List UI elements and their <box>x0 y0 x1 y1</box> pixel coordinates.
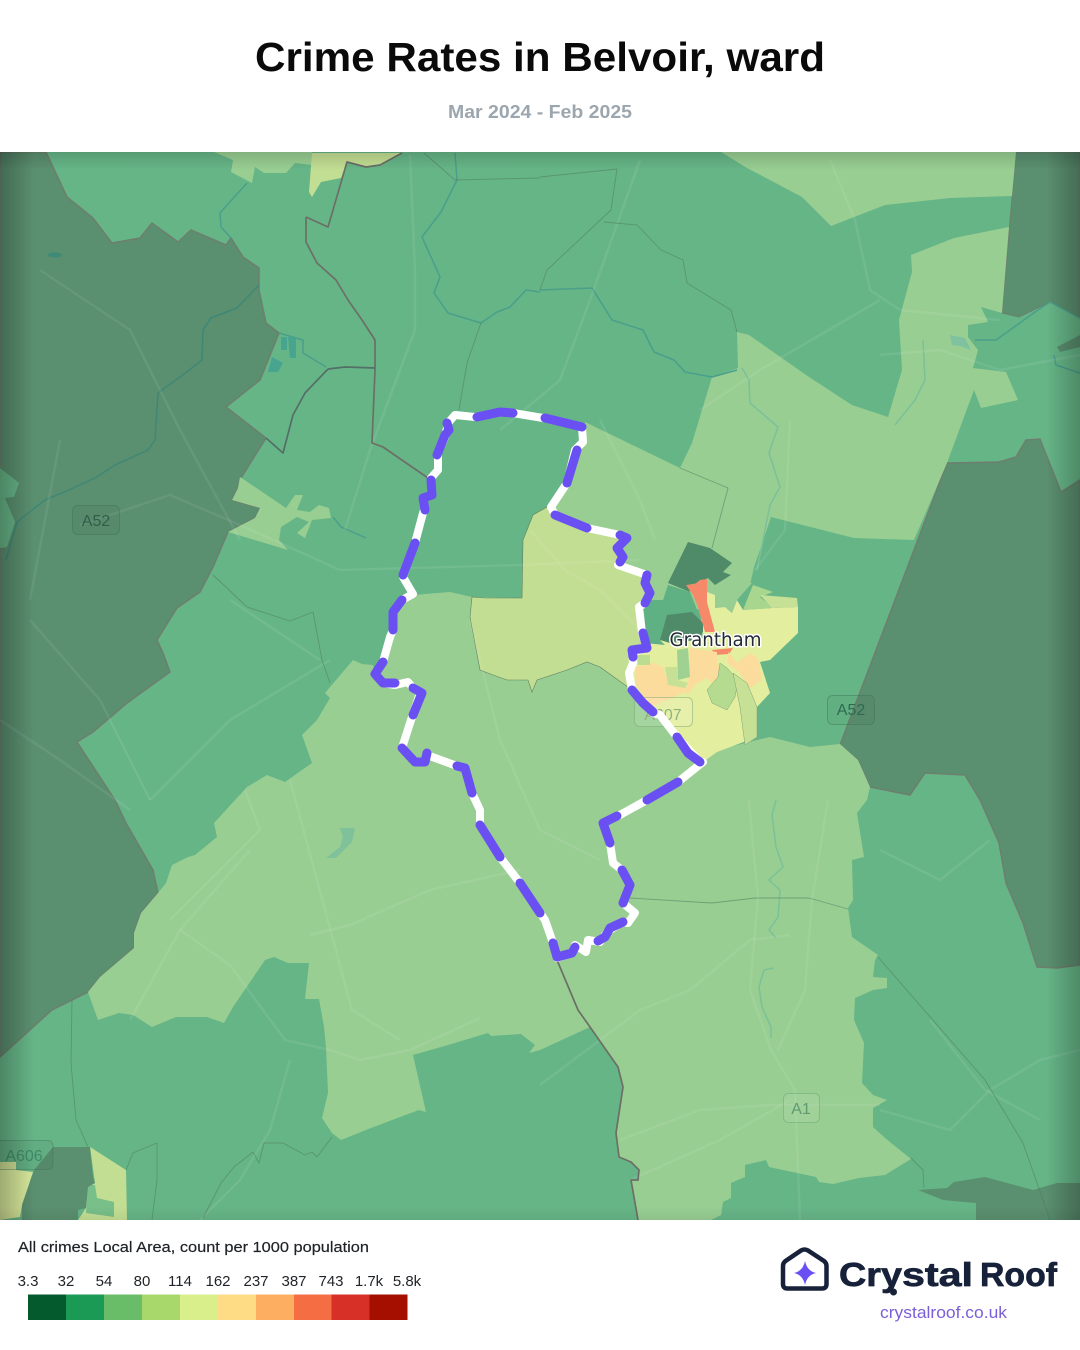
road label: A52 west: A52 <box>82 513 110 530</box>
region: dark east <box>840 439 1080 968</box>
ward boundary: Belvoir <box>375 412 703 958</box>
road label: A1 <box>784 1094 820 1122</box>
legend title: All crimes Local Area, count per 1000 population <box>18 1239 369 1256</box>
ward: pale green north-east <box>743 585 773 610</box>
ward: high crime orange centre <box>712 648 733 655</box>
gray district boundaries <box>266 153 639 1220</box>
ward: mid green west <box>645 585 702 645</box>
icon: house <box>783 1250 826 1288</box>
legend tick labels: 54 <box>96 1273 112 1290</box>
map edge shading <box>0 152 1080 1220</box>
legend tick labels: 3.3 <box>18 1273 38 1290</box>
website link: crystalroof.co.uk <box>880 1304 1008 1322</box>
ward: pale green north <box>716 582 752 613</box>
icon: star <box>794 1261 816 1285</box>
Grantham urban wards <box>632 542 798 762</box>
road label: A52 east: A52 <box>837 702 865 719</box>
title: Crime Rates in Belvoir, ward <box>255 34 825 80</box>
legend <box>18 1239 422 1320</box>
logo: Crystal Roof <box>783 1250 1058 1322</box>
subtitle: date range: Mar 2024 - Feb 2025 <box>448 101 632 122</box>
region: bottom-left dark <box>22 1147 95 1220</box>
thin boundary lines <box>71 153 1050 1220</box>
road label: A607: A607 <box>644 707 682 724</box>
wordmark: stal <box>902 1256 973 1293</box>
ward: peach right <box>728 652 762 688</box>
road label: A1: A1 <box>791 1101 811 1118</box>
legend colour scale <box>28 1294 408 1320</box>
wordmark: Cr <box>839 1256 881 1293</box>
legend tick labels: 80 <box>134 1273 150 1290</box>
road label: A607 <box>634 698 692 726</box>
ward: yellow green west <box>665 667 688 688</box>
ward: main pale yellow <box>632 592 798 762</box>
legend tick labels: 237 <box>243 1273 269 1290</box>
wordmark: Roof <box>980 1256 1058 1293</box>
ward: small square <box>637 655 650 665</box>
map base: mid green areas <box>0 152 1080 1220</box>
region: light west patch <box>228 477 331 550</box>
legend tick labels: 114 <box>168 1273 192 1290</box>
choropleth map <box>0 152 1080 1220</box>
legend tick labels: 162 <box>205 1273 231 1290</box>
region: bottom-left small green <box>86 1185 114 1217</box>
ward: yellow-green strip <box>733 673 757 745</box>
region: bottom-left yellow <box>0 1162 33 1220</box>
ward: peach centre <box>685 648 722 695</box>
region: light top-left parish <box>214 152 312 183</box>
place label: Grantham: Grantham <box>670 629 762 651</box>
icon: key dot on y <box>890 1288 897 1296</box>
region: dark west <box>0 152 279 1057</box>
region: mid green notch on west edge <box>0 468 19 548</box>
ward: dark north <box>668 542 732 592</box>
legend tick labels: 1.7k <box>355 1273 384 1290</box>
ward: high crime orange strip <box>686 579 715 632</box>
ward: dark west <box>660 612 703 643</box>
ward: green centre north <box>677 648 690 680</box>
region: light top right <box>721 152 1016 226</box>
region: dark bottom-right <box>918 1177 1080 1220</box>
boundary: white outline <box>375 412 703 958</box>
region: light south including Belvoir <box>88 592 911 1220</box>
region: dark north-east <box>1002 152 1080 317</box>
legend tick labels: 387 <box>281 1273 307 1290</box>
region: yellow-green top <box>309 153 402 197</box>
region: light north-east and central north <box>551 227 1018 612</box>
legend tick labels <box>18 1273 422 1290</box>
legend tick labels: 5.8k <box>393 1273 422 1290</box>
legend tick labels: 32 <box>58 1273 74 1290</box>
road label: A606 <box>0 1140 53 1170</box>
ward: peach left <box>635 663 688 707</box>
region: bottom-left yellow-green <box>78 1147 127 1220</box>
lakes <box>48 252 1080 858</box>
boundary: purple dashes <box>375 412 700 957</box>
roads <box>0 155 1080 1220</box>
rivers <box>6 153 1080 1038</box>
road label: A52 west <box>72 506 120 534</box>
wordmark: y <box>881 1256 903 1293</box>
region: yellow-green central <box>470 507 650 692</box>
wordmark <box>839 1256 1058 1293</box>
ward: yellow-green east <box>760 595 798 608</box>
ward: green south <box>707 663 738 710</box>
road label: A606: A606 <box>5 1148 43 1165</box>
legend tick labels: 743 <box>318 1273 344 1290</box>
road label: A52 east <box>828 696 874 724</box>
